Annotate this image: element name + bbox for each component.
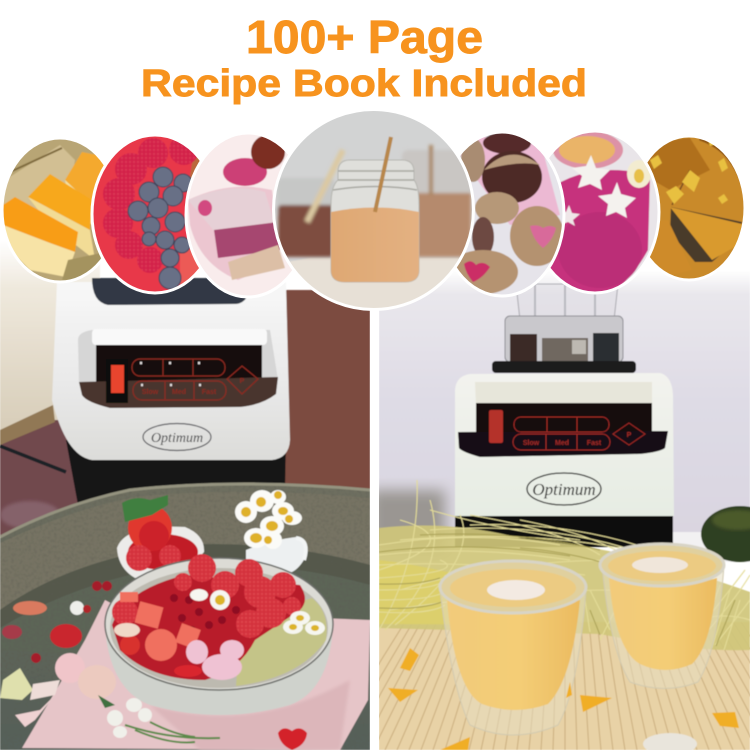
white body [52,282,290,460]
program diamond [227,366,258,394]
jar glass [402,150,472,195]
panel: left photo, blender and raspberry bowl [0,240,370,750]
logo oval [527,473,601,505]
tray grain [9,495,367,581]
jar chocolate [278,205,334,257]
raspberry [112,599,138,625]
raspberry [283,597,301,615]
floor [0,420,78,536]
lavender wall [379,270,750,540]
white ring [92,135,218,293]
cream petals [0,668,33,700]
chocolate cookie top [484,155,540,170]
tray rim highlight [0,484,370,537]
blueberry [165,212,185,232]
twin seeds [92,581,112,591]
green smoothie [236,598,327,686]
front cake side [3,225,75,277]
daisies [235,490,302,549]
white ring [274,110,474,310]
daisy bouquet [235,490,302,549]
pink flakes [223,158,267,186]
grass fronds light [379,480,750,650]
title [141,11,587,105]
raspberry [103,208,133,238]
darker crust edge [635,138,710,190]
raspberries [112,554,301,638]
dark cookie [483,132,531,154]
button labels [142,378,245,396]
heart window right [530,225,556,248]
raspberry [211,571,239,599]
heart cookie bottom [448,250,518,294]
backing [633,136,745,280]
rose [186,640,208,664]
program label: P [240,378,245,385]
star small [558,205,580,226]
control band [458,431,668,457]
blueberry [142,232,156,246]
recipe circle: berry smoothie bowl [90,130,220,300]
green stems [125,722,220,742]
white body [455,373,674,516]
recipe circle: orange flower cake [630,130,750,285]
chip [712,712,739,728]
recipe circle: heart cookies [435,125,570,300]
jar blade centre [542,338,588,362]
tray inner lip shadow [0,544,370,628]
pomegranate seed [31,653,41,663]
raspberry [236,610,264,638]
photo [630,130,750,285]
jelly fleck [198,200,212,216]
white ring [440,132,564,296]
middle cake side [28,197,95,260]
speed buttons [132,359,258,400]
fast label: Fast [202,389,217,396]
fast label: Fast [587,440,602,447]
button dividers [163,359,194,400]
chip [388,688,418,702]
photo [185,130,315,300]
raspberries [103,135,199,273]
tray floor [0,564,370,660]
raspberry right [159,545,181,567]
base plate [492,361,636,373]
heading line: Recipe Book Included: Recipe Book Included [141,63,587,105]
recipe circle: peanut butter smoothie jars [270,105,480,315]
star [598,182,636,218]
raspberry [169,135,199,165]
dividers [546,417,577,450]
photo [0,130,125,290]
raspberry [137,247,163,273]
dark wedge gap [670,207,742,262]
mango [701,506,750,562]
whole strawberry [128,505,172,551]
backdrop [435,125,570,300]
recipe circle: dragon fruit smoothie [530,130,665,300]
mat slats [325,622,750,750]
control window [96,345,262,383]
recipe circle: pink layered cake [185,130,315,300]
fruit mass [112,575,305,680]
coconut flakes [632,557,688,573]
floor light patch [0,501,60,529]
raspberry [244,576,276,608]
photo [435,125,570,300]
bowl body [105,625,333,715]
cake berry layer [214,222,280,258]
grass mass [379,526,750,650]
top cake [65,152,115,205]
raspberry [174,573,192,591]
piece [120,592,138,602]
chocolate cookie [482,151,542,203]
power switch [489,410,503,443]
hood lip [92,329,267,345]
smoothie surface [450,569,576,607]
front jar glass [331,160,419,282]
cookie left [475,192,519,224]
pomegranate seeds [170,594,240,634]
Optimum logo [143,424,211,450]
rose [220,640,244,660]
metal tray [0,484,370,750]
tray body [0,484,370,750]
program label: P [627,432,632,439]
med label: Med [555,440,569,447]
cake crack [672,170,690,205]
pale strawberry [114,623,140,637]
wrapper bottom [62,250,115,280]
cut slice [670,207,742,260]
jar ribs [535,284,595,362]
smoothie [609,578,717,670]
photo [90,130,220,300]
light paper [0,145,75,230]
raspberry [115,231,143,259]
glass rim [440,561,586,613]
chip [440,737,470,750]
granola edge [186,140,215,260]
bottom button row [133,381,226,400]
strawberry leaves [122,495,168,522]
rose right [78,665,116,699]
photo [530,130,665,300]
heart strawberry [278,728,307,750]
black base [66,440,286,505]
switch rocker [111,365,124,393]
slow label: Slow [523,440,540,447]
blueberry [163,186,183,206]
cake slice [188,187,280,280]
jar dark block right [593,333,619,362]
recipe circle: mango cheesecake [0,130,125,290]
rose [202,654,242,680]
indicator dots [140,363,201,385]
jar smoothie [331,208,419,282]
paper crease [10,148,62,172]
backing [531,131,659,293]
bowl rim [105,558,333,690]
bowl inner wall [110,568,328,688]
left wall shade [370,490,445,550]
raspberry [188,554,216,582]
back left jar [277,150,343,257]
panel: right photo, blender and mango smoothies [325,270,750,750]
photo [270,105,480,315]
piece [135,601,163,629]
blueberry [148,198,168,218]
raspberry [235,559,263,587]
blueberry [174,174,192,192]
control band [79,377,278,408]
top cake side [65,180,92,225]
white jug [246,537,306,572]
jar straw [307,150,343,222]
backdrop [0,130,125,290]
small flower [627,160,651,188]
grass lighter band [379,560,545,625]
passion fruit rim [553,131,623,169]
napkin fold shade [150,680,350,750]
bowl berries [128,534,198,570]
button labels [523,432,632,447]
chip [566,682,572,698]
top button row [514,417,609,432]
blueberry [139,182,159,202]
pale pink petals [15,695,55,727]
dark petal [2,625,22,639]
heading line: 100+ Page: 100+ Page [246,11,483,63]
jar upper [516,284,618,320]
plum [251,135,285,169]
lower coral area [180,230,220,295]
cake clear top [188,188,275,232]
small daisy [70,601,84,615]
switch housing [106,359,128,403]
hood shading [78,330,278,382]
left smoothie glass [440,561,586,735]
blender, right photo [455,284,674,547]
backing [186,133,310,297]
dipped cookie [472,217,494,257]
black base [455,505,673,547]
strawberry left [120,635,140,655]
cake crumb base [228,245,285,280]
control window [476,403,652,441]
pink smear [448,135,560,225]
open strawberry [50,624,82,648]
bamboo mat [325,622,750,750]
Optimum logo [527,473,601,505]
piece [175,623,201,649]
logo word: Optimum [532,480,596,499]
backdrop [270,105,480,315]
jar glass [277,178,335,218]
bowl [117,527,204,578]
med label: Med [172,389,186,396]
star [572,155,610,190]
flower specks [645,138,728,261]
scattered petals and berries [0,581,307,750]
smoothie [447,600,580,710]
jug handle [296,538,306,560]
rose left [55,653,85,683]
middle cake top [28,174,92,230]
jug body [246,537,306,572]
brown wall [280,290,370,500]
small berry [83,605,91,613]
petals [235,490,302,549]
right smoothie glass [600,544,724,688]
blueberry [128,201,148,221]
grass fronds dark [379,534,735,646]
cake surface [630,130,750,285]
program diamond [613,423,645,445]
white ring [531,131,659,293]
backing [440,132,564,296]
raspberry [126,545,152,571]
backing [274,110,474,310]
slow label: Slow [142,389,159,396]
smoothie dark side [558,212,642,288]
strawberry front [139,521,169,551]
blueberry [142,217,160,235]
smoothie surface [608,551,716,581]
large bowl [105,554,333,715]
smoothie body [540,170,650,296]
coconut flakes [487,580,545,600]
stem daisies [107,698,152,738]
logo word: Optimum [151,431,203,446]
orange petal [13,601,47,615]
jar dark block left [510,334,537,362]
blender, left photo [52,278,290,505]
marble board [270,258,480,315]
chip [400,648,419,671]
gold straw [375,137,391,212]
flower centres [241,491,293,544]
raspberry [270,572,296,598]
lower crust [640,220,692,278]
jar collar [92,278,252,305]
glass rim [600,544,724,586]
blade highlight [572,340,586,354]
feather grass [379,480,750,650]
blueberry [174,237,190,253]
daisy centres [215,595,319,631]
blueberry [161,249,179,267]
backdrop [185,130,315,300]
top button row [132,359,225,376]
crust rim [700,138,745,190]
flower centre [634,169,644,183]
raspberry [115,153,147,185]
strawberry bottom [174,665,202,677]
table surface [672,532,750,562]
blueberry [159,267,181,289]
blueberry [156,231,174,249]
power cable [0,446,66,472]
logo oval [143,424,211,450]
speed buttons [513,417,645,450]
cotton ball [643,733,697,750]
mango highlight [712,510,750,530]
white ring [186,133,310,297]
heart cookie right [510,206,564,266]
small strawberry bowl [117,495,204,578]
pink napkin [22,600,370,750]
white ring [633,136,745,280]
smoothie base [90,130,220,300]
skirting board [0,405,55,445]
piece [145,629,177,661]
heart window bottom [464,261,490,282]
pink rose [186,640,244,680]
strawberry pieces [120,592,202,677]
beige wall [0,252,101,430]
glass body [602,565,724,688]
jar rim lines [333,171,417,190]
white ring [2,138,118,282]
mat base [379,622,750,750]
blueberry [153,167,173,187]
backdrop [530,130,665,300]
front cake top [3,197,78,252]
raspberry [103,178,135,210]
white petals [30,680,60,700]
bottom button row [513,434,610,450]
rose leaf [98,695,115,708]
mango chips [388,648,739,750]
jar smoothie [402,193,471,257]
jar lower [505,316,623,362]
jar straw [429,145,433,195]
chip [580,695,612,712]
raspberry [256,598,286,628]
tray wall shading [0,492,370,610]
power switch [106,359,128,403]
raspberry [138,138,168,168]
bowl daisies [190,589,325,635]
passion fruit flesh [559,136,615,164]
blueberries [128,167,192,289]
glass body [440,590,586,735]
hood opening [475,382,652,405]
back right jar [402,145,472,257]
cookie left edge [461,138,485,182]
